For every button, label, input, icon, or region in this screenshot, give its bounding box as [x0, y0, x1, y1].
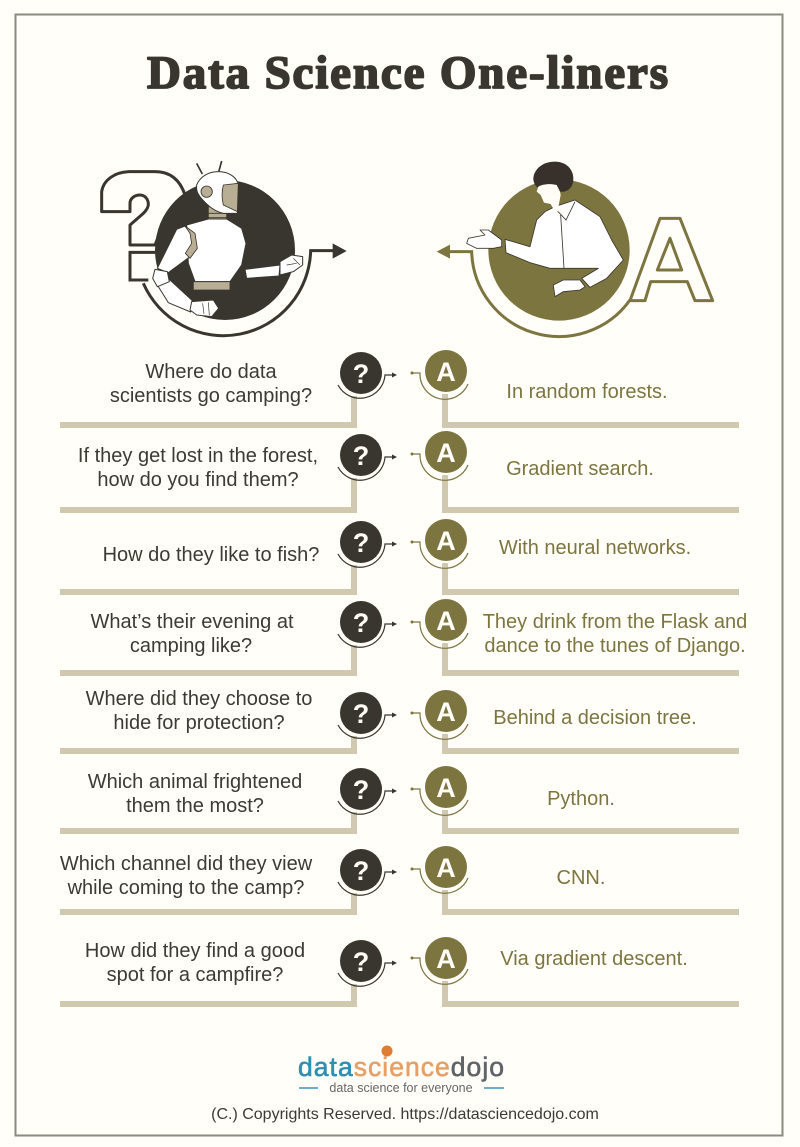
row 5	[60, 688, 739, 751]
person	[505, 200, 623, 287]
arc arrow	[450, 252, 630, 337]
row 1	[60, 350, 739, 425]
question 8: How did they find a good	[85, 940, 305, 962]
row 3	[60, 519, 739, 592]
row 8	[60, 937, 739, 1004]
row 4	[60, 599, 747, 673]
row 6: A	[436, 773, 456, 803]
row 1: ?	[353, 359, 369, 389]
arc arrow	[143, 251, 335, 336]
answer 2: Gradient search.	[506, 458, 654, 480]
logo: datasciencedojo	[298, 1046, 504, 1095]
row 3: A	[436, 526, 456, 556]
question 5: Where did they choose to	[86, 688, 312, 710]
row 6	[60, 766, 739, 831]
question 2: how do you find them?	[97, 469, 299, 491]
illustration: person with letter A	[437, 162, 713, 337]
row 8: A	[436, 944, 456, 974]
answer 8: Via gradient descent.	[500, 948, 688, 970]
row 2: ?	[353, 441, 369, 471]
question 6: Which animal frightened	[88, 771, 302, 793]
question 1: Where do data	[145, 361, 277, 383]
row 4: ?	[353, 608, 369, 638]
question 8: spot for a campfire?	[107, 964, 283, 986]
title: Data Science One-liners	[147, 47, 668, 99]
answer 6: Python.	[547, 788, 615, 810]
answer 5: Behind a decision tree.	[493, 707, 697, 729]
robot	[197, 161, 222, 174]
row 3: ?	[353, 528, 369, 558]
row 1: A	[436, 357, 456, 387]
question 5: hide for protection?	[113, 712, 285, 734]
dark circle	[155, 180, 295, 320]
question 7: while coming to the camp?	[67, 877, 304, 899]
answer 7: CNN.	[557, 867, 605, 889]
row 2: A	[436, 438, 456, 468]
row 2	[60, 431, 739, 510]
answer 4: dance to the tunes of Django.	[484, 635, 746, 657]
question 3: How do they like to fish?	[103, 544, 319, 566]
copyright footer: (C.) Copyrights Reserved. https://datasciencedojo.com	[211, 1106, 599, 1123]
question 4: What’s their evening at	[90, 611, 294, 633]
row 5: ?	[353, 699, 369, 729]
question 7: Which channel did they view	[60, 853, 313, 875]
logo tagline: data science for everyone	[329, 1081, 473, 1095]
answer 4: They drink from the Flask and	[483, 611, 747, 633]
row 7: ?	[353, 856, 369, 886]
question 6: them the most?	[126, 795, 264, 817]
row 6: ?	[353, 775, 369, 805]
illustration: robot with question mark	[102, 161, 347, 336]
question 1: scientists go camping?	[110, 385, 312, 407]
letter A outline	[630, 218, 713, 301]
question mark outline	[102, 172, 185, 245]
row 7	[60, 846, 739, 912]
logo: datasciencedojo: datasciencedojo	[298, 1052, 504, 1082]
row 4: A	[436, 606, 456, 636]
question 4: camping like?	[130, 635, 252, 657]
row 7: A	[436, 853, 456, 883]
row 5: A	[436, 697, 456, 727]
answer 3: With neural networks.	[499, 537, 691, 559]
answer 1: In random forests.	[506, 381, 668, 403]
question 2: If they get lost in the forest,	[78, 445, 318, 467]
olive circle	[488, 179, 630, 321]
row 8: ?	[353, 947, 369, 977]
